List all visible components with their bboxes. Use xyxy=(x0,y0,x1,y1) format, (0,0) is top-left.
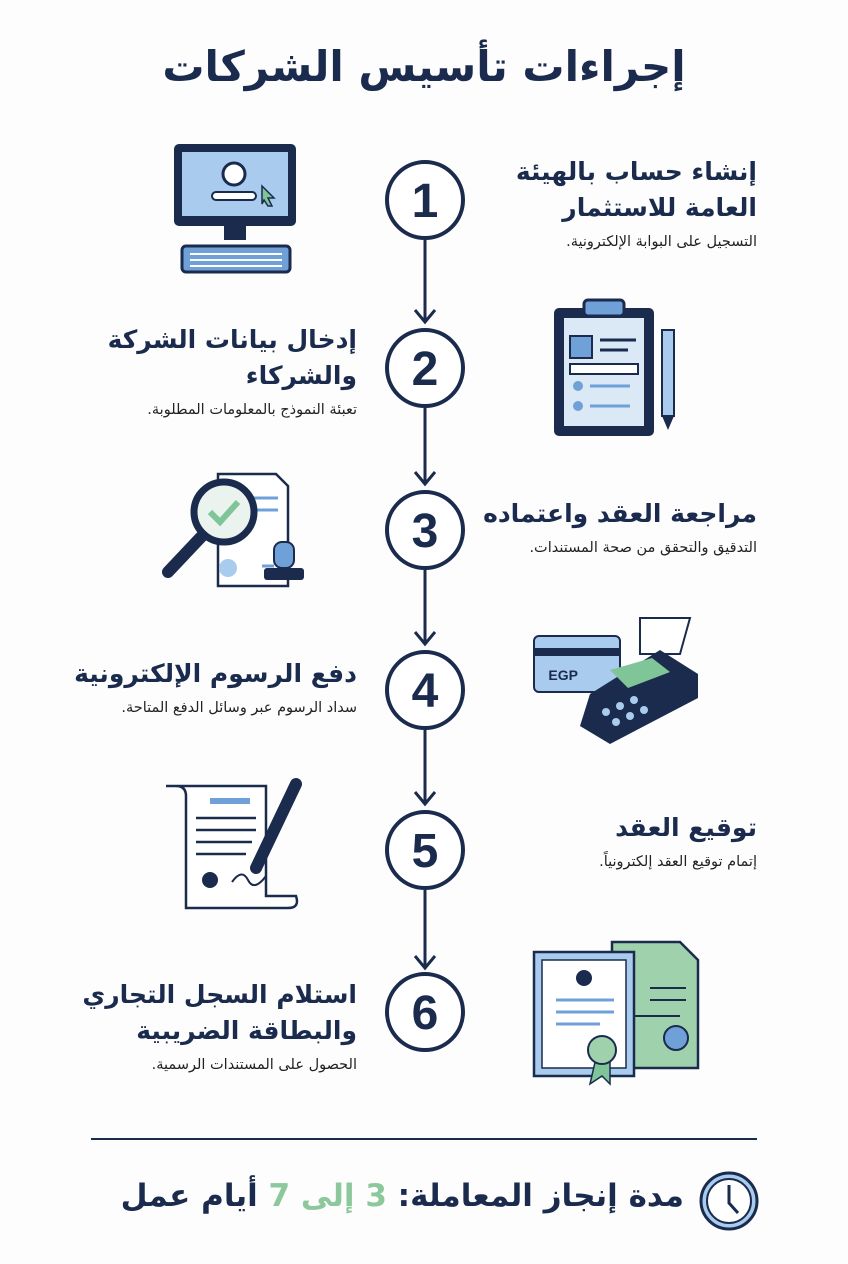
step 4 text: دفع الرسوم الإلكترونية xyxy=(74,659,357,688)
icon: magnifier and documents xyxy=(162,472,304,588)
step 6 text xyxy=(82,980,357,1073)
timeline: circles and arrows: 2 xyxy=(412,343,438,396)
step 6 text: استلام السجل التجاري xyxy=(82,980,357,1009)
timeline: circles and arrows: 1 xyxy=(412,175,438,228)
icon: POS terminal: EGP xyxy=(548,667,578,683)
step 3 text: مراجعة العقد واعتماده xyxy=(483,499,757,528)
divider xyxy=(91,1138,757,1140)
step 1 text xyxy=(516,157,757,250)
step 4 text xyxy=(74,659,357,716)
step 3 text xyxy=(483,499,757,556)
step 2 text: تعبئة النموذج بالمعلومات المطلوبة. xyxy=(147,402,357,418)
step 5 text xyxy=(599,813,757,870)
step 3 text: التدقيق والتحقق من صحة المستندات. xyxy=(529,540,757,556)
timeline: circles and arrows: 4 xyxy=(412,665,439,718)
step 6 text: والبطاقة الضريبية xyxy=(136,1016,357,1045)
icon: computer xyxy=(174,144,296,274)
step 1 text: إنشاء حساب بالهيئة xyxy=(516,157,757,186)
icon: POS terminal xyxy=(533,617,698,744)
step 5 text: إتمام توقيع العقد إلكترونياً. xyxy=(599,854,757,870)
icon: clock xyxy=(700,1172,758,1230)
duration text: مدة إنجاز المعاملة: 3 إلى 7 أيام عمل xyxy=(121,1178,684,1214)
icon: clipboard xyxy=(554,298,675,436)
timeline: circles and arrows: 6 xyxy=(412,987,438,1040)
step 1 text: العامة للاستثمار xyxy=(562,193,757,222)
step 2 text: والشركاء xyxy=(246,361,357,390)
icon: certificates xyxy=(532,940,700,1086)
timeline: circles and arrows: 5 xyxy=(412,825,438,878)
footer: duration xyxy=(121,1172,758,1230)
step 2 text xyxy=(108,325,357,418)
step 5 text: توقيع العقد xyxy=(615,813,757,842)
step 2 text: إدخال بيانات الشركة xyxy=(108,325,357,354)
step 4 text: سداد الرسوم عبر وسائل الدفع المتاحة. xyxy=(121,700,357,716)
icon: scroll and pen xyxy=(166,778,302,910)
step 1 text: التسجيل على البوابة الإلكترونية. xyxy=(566,234,757,250)
timeline: circles and arrows: 3 xyxy=(412,505,438,558)
step 6 text: الحصول على المستندات الرسمية. xyxy=(152,1057,357,1073)
title: إجراءات تأسيس الشركات xyxy=(162,42,686,91)
